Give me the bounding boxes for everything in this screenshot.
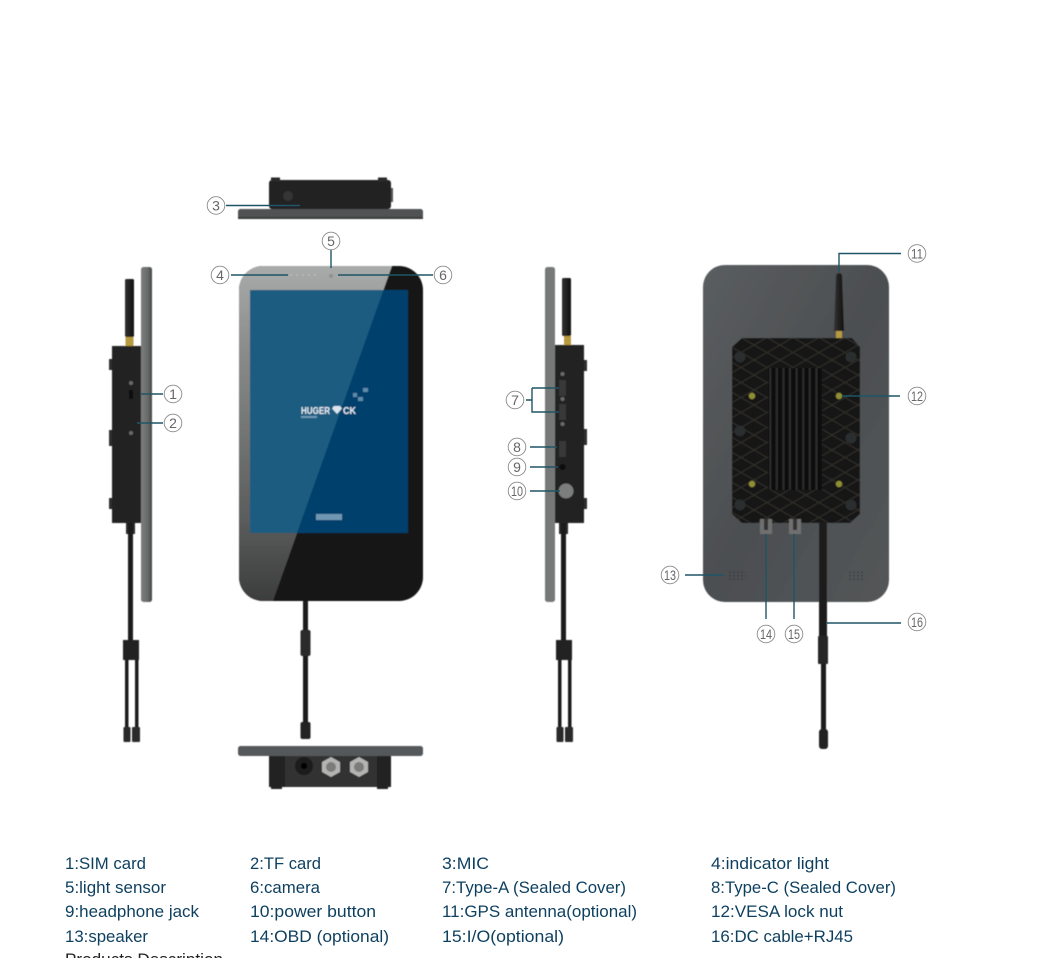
callout 7 [506, 391, 524, 409]
callout 1: 1 [169, 386, 177, 402]
back panel [703, 265, 889, 602]
callout 9: 9 [513, 459, 521, 475]
rubber feet [734, 352, 856, 510]
legend text: 4:indicator light [711, 855, 829, 873]
callout 2 [164, 414, 182, 432]
callout 6: 6 [439, 267, 447, 283]
speaker grilles [728, 571, 865, 582]
logo on screen: HUGER [301, 405, 330, 417]
small screen caption [316, 514, 342, 520]
legend text: 6:camera [250, 879, 321, 897]
legend text: 9:headphone jack [65, 903, 200, 921]
callout 3: 3 [212, 198, 220, 214]
legend text [65, 855, 896, 958]
callout 5 [322, 232, 340, 250]
antenna [834, 273, 844, 331]
legend text: 1:SIM card [65, 855, 146, 873]
logo on screen [301, 388, 368, 418]
right side view [545, 267, 587, 742]
legend text: 3:MIC [442, 855, 489, 873]
callout 10: 10 [511, 483, 523, 499]
callout 7: 7 [511, 392, 519, 408]
heat sink fins [768, 368, 822, 490]
callout 4 [211, 266, 229, 284]
callout 9 [508, 458, 526, 476]
callout 6 [434, 266, 452, 284]
legend text: 15:I/O(optional) [442, 928, 564, 946]
legend text: 8:Type-C (Sealed Cover) [711, 879, 896, 897]
cable [300, 601, 310, 739]
legend text: 7:Type-A (Sealed Cover) [442, 879, 626, 897]
top view of device [238, 178, 423, 219]
front bezel [239, 266, 423, 601]
legend text: 16:DC cable+RJ45 [711, 928, 853, 946]
legend text: 5:light sensor [65, 879, 167, 897]
bottom view of device [238, 746, 423, 789]
legend text: 14:OBD (optional) [250, 928, 389, 946]
callout lines [137, 206, 901, 623]
VESA nuts [749, 393, 842, 487]
antenna gold connector [836, 331, 842, 339]
DC cable [818, 522, 828, 749]
callout 11: 11 [911, 246, 923, 262]
rear module housing [732, 338, 860, 523]
legend text: 10:power button [250, 903, 376, 921]
callout 2: 2 [169, 415, 177, 431]
callout 16: 16 [911, 614, 923, 630]
back view [703, 265, 889, 749]
front view of device [239, 266, 423, 739]
callout 15: 15 [788, 626, 800, 642]
indicator dots and camera [290, 274, 333, 278]
callout 1 [164, 385, 182, 403]
callout 3 [207, 197, 225, 214]
callout 12: 12 [911, 388, 923, 404]
legend text: 2:TF card [250, 855, 321, 873]
callout 14: 14 [760, 626, 772, 642]
left side view [109, 267, 152, 742]
connectors [760, 519, 801, 534]
callout numbers [164, 197, 926, 643]
legend text: 12:VESA lock nut [711, 903, 843, 921]
callout 4: 4 [216, 267, 224, 283]
screen [250, 290, 408, 533]
callout 8 [508, 438, 526, 456]
legend text: 11:GPS antenna(optional) [442, 903, 637, 921]
logo on screen: CK [343, 405, 356, 417]
legend text: 13:speaker [65, 928, 149, 946]
callout 8: 8 [513, 439, 521, 455]
callout 13: 13 [664, 567, 676, 583]
callout 5: 5 [327, 233, 335, 249]
